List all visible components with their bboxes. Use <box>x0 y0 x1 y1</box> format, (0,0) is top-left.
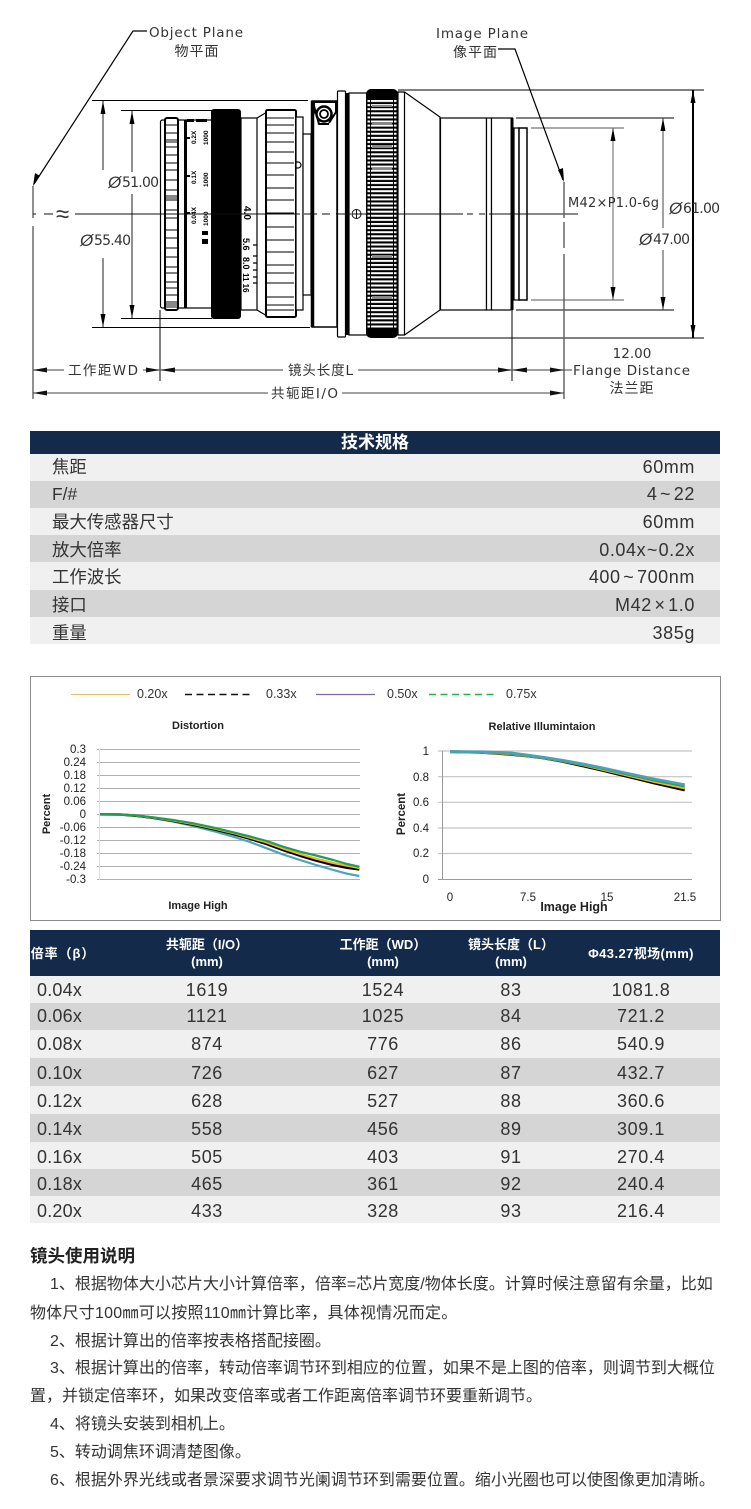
row: magnification <box>30 535 720 562</box>
distortion chart: -0.3 <box>66 874 86 886</box>
row 0.16x: 0.16x <box>37 1147 82 1167</box>
row: focal length: 60mm <box>643 457 695 477</box>
rear barrel <box>398 92 527 335</box>
dimension labels: 51.00 <box>122 175 159 191</box>
row 0.12x: 527 <box>367 1091 399 1111</box>
spec table header <box>30 431 720 454</box>
working distance dimension: 工作距WD <box>68 363 138 379</box>
dimension labels: Ø <box>107 173 123 192</box>
chart legend <box>71 687 537 701</box>
distortion chart: 0.24 <box>64 757 87 769</box>
row 0.06x: 1121 <box>186 1006 228 1026</box>
step 2: 2、根据计算出的倍率按表格搭配接圈。 <box>50 1333 331 1350</box>
row: f number: 4 ~ 22 <box>647 484 695 504</box>
row 0.08x <box>30 1030 720 1058</box>
row 0.18x <box>30 1169 720 1196</box>
row 0.18x: 240.4 <box>617 1174 665 1194</box>
relative illumination chart: 0.6 <box>413 797 429 809</box>
header: lens length: (mm) <box>495 954 527 969</box>
focus ring <box>257 110 311 317</box>
flange distance label <box>573 346 690 396</box>
relative illumination chart: 15 <box>601 892 613 904</box>
scale marks <box>187 119 258 293</box>
relative illumination chart: Relative Illumintaion <box>489 721 596 733</box>
relative illumination chart: 0 <box>447 892 453 904</box>
row: weight <box>30 617 720 644</box>
step 3 line 1: 3、根据计算出的倍率，转动倍率调节环到相应的位置，如果不是上图的倍率，则调节到大概位 <box>50 1360 715 1377</box>
row 0.16x: 270.4 <box>617 1147 665 1167</box>
row 0.20x: 216.4 <box>617 1201 665 1221</box>
extension and dimension lines <box>92 90 704 381</box>
row 0.16x: 403 <box>367 1147 399 1167</box>
row 0.16x: 505 <box>191 1147 223 1167</box>
row: wavelength: 工作波长 <box>52 567 122 587</box>
relative illumination chart: Percent <box>396 793 408 835</box>
row 0.20x: 328 <box>367 1201 399 1221</box>
scale marks: 0.2X <box>191 130 198 144</box>
row 0.08x: 776 <box>367 1034 399 1054</box>
row 0.10x <box>30 1058 720 1086</box>
step 6: 6、根据外界光线或者景深要求调节光阑调节环到需要位置。缩小光圈也可以使图像更加清晰。 <box>50 1472 715 1489</box>
chart legend: 0.20x <box>137 687 168 701</box>
dimension labels: Ø <box>638 230 654 249</box>
scale marks: 1000 <box>203 130 210 145</box>
image plane callout: 像平面 <box>453 44 498 60</box>
flange distance label: 12.00 <box>613 346 651 362</box>
row 0.12x <box>30 1086 720 1114</box>
row 0.14x: 0.14x <box>37 1119 82 1139</box>
scale marks: 8.0 <box>241 257 251 270</box>
distortion chart: 0.3 <box>70 744 86 756</box>
working distance dimension <box>33 363 572 379</box>
row 0.12x: 628 <box>191 1091 223 1111</box>
row 0.08x: 874 <box>191 1034 223 1054</box>
row: sensor size: 最大传感器尺寸 <box>52 512 174 532</box>
header: working distance: (mm) <box>367 954 399 969</box>
distortion chart: 0.18 <box>64 770 86 782</box>
distortion chart: 0 <box>80 809 86 821</box>
dimension labels: 61.00 <box>683 201 720 217</box>
distortion chart <box>41 720 360 912</box>
object plane callout: Object Plane <box>149 25 243 41</box>
lens dimension drawing <box>32 25 720 402</box>
spec table header: 技术规格 <box>341 433 409 452</box>
header: conjugate <box>166 937 248 969</box>
scale marks: 4.0 <box>241 206 252 220</box>
scale barrel <box>185 118 258 310</box>
row 0.20x <box>30 1196 720 1223</box>
scale marks: 1000 <box>203 172 210 187</box>
image plane callout <box>436 26 564 399</box>
row 0.18x: 465 <box>191 1174 223 1194</box>
row: magnification: 0.04x ~ 0.2x <box>599 540 695 560</box>
distortion chart: -0.18 <box>60 848 86 860</box>
step 4: 4、将镜头安装到相机上。 <box>50 1416 235 1433</box>
header: working distance <box>340 937 426 969</box>
center line <box>33 201 578 228</box>
header: lens length <box>468 937 554 969</box>
row 0.18x: 92 <box>500 1174 522 1194</box>
distortion chart: Image High <box>168 900 228 912</box>
row 0.04x: 1524 <box>362 980 404 1000</box>
image plane callout: Image Plane <box>436 26 528 42</box>
row 0.04x: 0.04x <box>37 980 82 1000</box>
scale marks: 11 16 <box>241 273 250 293</box>
chart legend: 0.33x <box>266 687 297 701</box>
row: f number: F/# <box>52 484 77 504</box>
row 0.08x: 0.08x <box>37 1034 82 1054</box>
magnification table header <box>30 930 720 976</box>
dimension labels: 47.00 <box>653 232 690 248</box>
chart legend: 0.50x <box>387 687 418 701</box>
scale marks: 1000 <box>203 211 210 226</box>
row 0.04x <box>30 976 720 1003</box>
step 1 line 2: 物体尺寸100㎜可以按照110㎜计算比率，具体视情况而定。 <box>30 1305 457 1322</box>
dimension labels: Ø <box>79 231 95 250</box>
row 0.12x: 360.6 <box>617 1091 665 1111</box>
conjugate distance dimension: 共轭距I/O <box>271 386 338 402</box>
row 0.04x: 1081.8 <box>612 980 670 1000</box>
row: mount <box>30 590 720 617</box>
object plane callout <box>33 25 243 399</box>
distortion chart: Distortion <box>172 720 224 732</box>
row 0.14x: 558 <box>191 1119 223 1139</box>
relative illumination chart: 0 <box>423 874 429 886</box>
scale marks: 5.6 <box>241 238 251 251</box>
row 0.06x <box>30 1003 720 1030</box>
conjugate distance dimension <box>33 386 564 402</box>
chart legend: 0.75x <box>506 687 537 701</box>
row 0.10x: 627 <box>367 1063 399 1083</box>
lens body <box>160 89 527 338</box>
knurled aperture ring <box>366 89 398 338</box>
row 0.14x: 309.1 <box>617 1119 665 1139</box>
row 0.04x: 1619 <box>186 980 228 1000</box>
row: f number <box>30 481 720 508</box>
row 0.06x: 721.2 <box>617 1006 665 1026</box>
object plane callout: 物平面 <box>174 43 220 59</box>
instructions heading: 镜头使用说明 <box>30 1246 135 1266</box>
row: weight: 385g <box>653 623 695 643</box>
working distance dimension: 镜头长度L <box>288 363 353 379</box>
distortion chart: -0.12 <box>60 835 86 847</box>
distortion chart: Percent <box>41 793 53 834</box>
row 0.12x: 88 <box>500 1091 522 1111</box>
flange distance label: Flange Distance <box>573 363 690 379</box>
relative illumination chart: 7.5 <box>520 892 536 904</box>
header: magnification: 倍率（β） <box>31 946 95 960</box>
row 0.10x: 726 <box>191 1063 223 1083</box>
relative illumination chart: 21.5 <box>674 892 696 904</box>
row: sensor size <box>30 508 720 535</box>
front ring <box>160 118 186 310</box>
header: working distance: 工作距（WD） <box>340 937 426 952</box>
row 0.06x: 84 <box>500 1006 522 1026</box>
row 0.08x: 86 <box>500 1034 522 1054</box>
distortion chart: -0.06 <box>60 822 86 834</box>
relative illumination chart: 0.4 <box>413 823 430 835</box>
row 0.10x: 0.10x <box>37 1063 82 1083</box>
row 0.04x: 83 <box>500 980 522 1000</box>
header: conjugate: (mm) <box>191 954 223 969</box>
row 0.10x: 432.7 <box>617 1063 665 1083</box>
step 5: 5、转动调焦环调清楚图像。 <box>50 1444 251 1461</box>
relative illumination chart: 0.2 <box>413 848 429 860</box>
relative illumination chart: 0.8 <box>413 772 429 784</box>
row: focal length <box>30 454 720 481</box>
row: wavelength <box>30 562 720 590</box>
row 0.06x: 1025 <box>362 1006 404 1026</box>
dimension arrows <box>100 90 696 338</box>
focus band <box>211 109 241 319</box>
row 0.06x: 0.06x <box>37 1006 82 1026</box>
spec table <box>30 431 720 644</box>
scale marks: 0.1X <box>191 170 198 184</box>
relative illumination chart <box>396 721 696 914</box>
header: field of view: Φ43.27视场(mm) <box>588 946 694 960</box>
row: wavelength: 400 ~ 700nm <box>589 567 695 587</box>
row 0.20x: 433 <box>191 1201 223 1221</box>
row 0.20x: 93 <box>500 1201 522 1221</box>
scale marks: 0.04X <box>191 206 198 224</box>
header: conjugate: 共轭距（I/O） <box>166 937 248 952</box>
row 0.18x: 0.18x <box>37 1174 82 1194</box>
flange <box>338 91 367 337</box>
center line: ≈ <box>56 201 69 228</box>
dimension labels: M42×P1.0-6g <box>568 196 659 211</box>
row 0.10x: 87 <box>500 1063 522 1083</box>
distortion chart: -0.24 <box>60 861 87 873</box>
row 0.14x: 89 <box>500 1119 522 1139</box>
distortion chart: 0.12 <box>64 783 86 795</box>
row: mount: 接口 <box>52 595 87 615</box>
header: lens length: 镜头长度（L） <box>468 937 554 952</box>
step 1 line 1: 1、根据物体大小芯片大小计算倍率，倍率=芯片宽度/物体长度。计算时候注意留有余量，比如 <box>50 1276 713 1293</box>
row: magnification: 放大倍率 <box>52 540 122 560</box>
row 0.12x: 0.12x <box>37 1091 82 1111</box>
row 0.14x <box>30 1114 720 1142</box>
row 0.18x: 361 <box>367 1174 399 1194</box>
row 0.14x: 456 <box>367 1119 399 1139</box>
row: sensor size: 60mm <box>643 512 695 532</box>
row 0.16x: 91 <box>500 1147 522 1167</box>
step 3 line 2: 置，并锁定倍率环，如果改变倍率或者工作距离倍率调节环要重新调节。 <box>30 1388 542 1405</box>
row 0.16x <box>30 1142 720 1169</box>
relative illumination chart: 1 <box>423 746 429 758</box>
dimension labels: Ø <box>668 199 684 218</box>
row: focal length: 焦距 <box>52 457 87 477</box>
instructions text <box>30 1275 715 1489</box>
dimension labels <box>79 173 720 250</box>
row 0.20x: 0.20x <box>37 1201 82 1221</box>
row 0.08x: 540.9 <box>617 1034 665 1054</box>
row: mount: M42 × 1.0 <box>615 595 695 615</box>
row: weight: 重量 <box>52 623 87 643</box>
distortion chart: 0.06 <box>64 796 86 808</box>
mount block with screw <box>312 101 337 327</box>
relative illumination chart: Image High <box>540 900 608 914</box>
magnification table <box>30 930 720 1223</box>
dimension labels: 55.40 <box>94 233 131 249</box>
flange distance label: 法兰距 <box>610 380 654 396</box>
